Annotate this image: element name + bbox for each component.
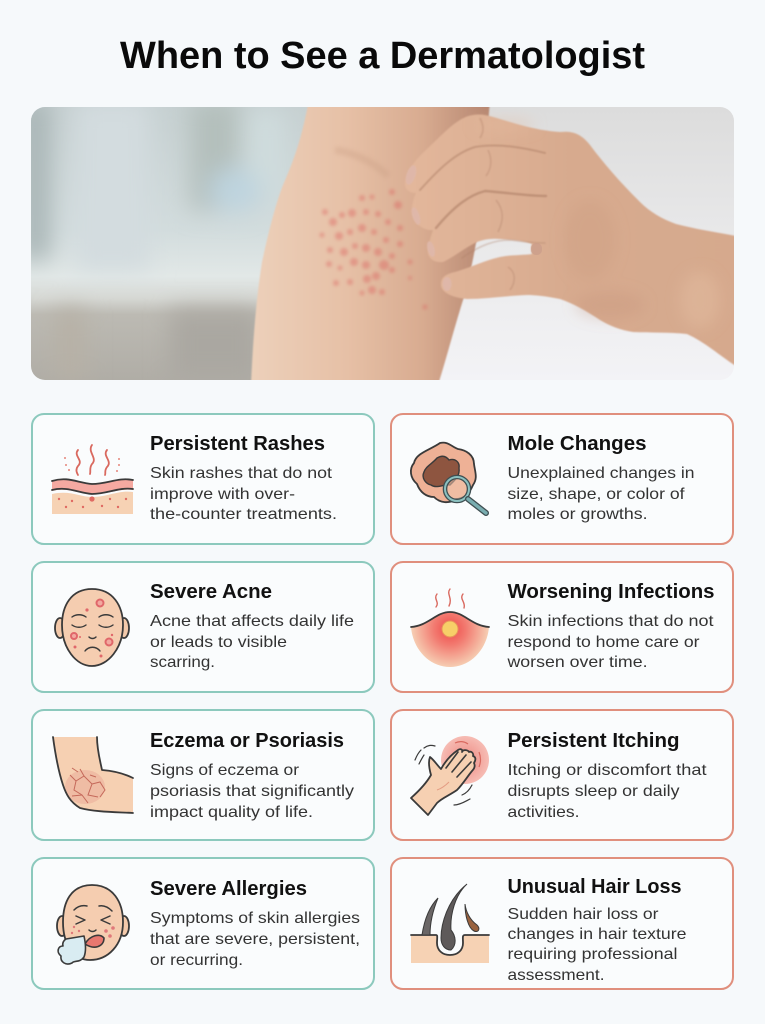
description: activities. — [508, 804, 580, 821]
description: Skin rashes that do not — [150, 465, 333, 482]
description — [506, 613, 714, 671]
description: impact quality of life. — [150, 804, 313, 821]
description: scarring. — [150, 654, 215, 671]
card: severe acne — [32, 562, 374, 692]
hand — [405, 115, 736, 366]
photo: hand scratching a rash on the forearm — [20, 100, 736, 385]
heading: Severe Acne — [150, 581, 272, 603]
description — [150, 762, 354, 821]
knuckle marks — [480, 118, 514, 290]
heading: Eczema or Psoriasis — [150, 730, 344, 752]
card: unusual hair loss — [391, 858, 733, 989]
rash — [320, 189, 428, 310]
description: moles or growths. — [508, 506, 648, 523]
card: eczema or psoriasis — [32, 710, 374, 840]
icon: cracked skin on elbow — [53, 737, 133, 813]
description — [150, 465, 337, 523]
description — [150, 613, 354, 671]
icon: mole under magnifying glass — [411, 443, 486, 513]
description: psoriasis that significantly — [150, 783, 354, 800]
description — [150, 910, 360, 969]
description: that are severe, persistent, — [150, 931, 360, 948]
icon: face with acne — [55, 589, 129, 666]
description: Sudden hair loss or — [508, 906, 659, 923]
description: changes in hair texture — [508, 926, 687, 943]
card: persistent itching — [391, 710, 733, 840]
card: mole changes — [391, 414, 733, 544]
description — [508, 762, 707, 821]
description: or recurring. — [150, 952, 243, 969]
icon: sneezing face — [57, 885, 129, 964]
description: disrupts sleep or daily — [508, 783, 680, 800]
card: severe allergies — [32, 858, 374, 989]
description: size, shape, or color of — [508, 486, 685, 503]
heading: Persistent Itching — [508, 730, 680, 752]
description — [508, 465, 694, 523]
description: Signs of eczema or — [150, 762, 300, 779]
heading: Unusual Hair Loss — [508, 876, 682, 898]
heading: Mole Changes — [508, 433, 646, 455]
card: worsening infections — [391, 562, 733, 692]
description: Itching or discomfort that — [508, 762, 707, 779]
icon: hair follicle — [411, 884, 489, 963]
fingernails — [404, 164, 452, 291]
description — [508, 906, 687, 984]
hand shading — [420, 146, 546, 258]
icon: scratching hand — [411, 736, 489, 815]
description: Skin infections that do not — [508, 613, 714, 630]
description: or leads to visible — [150, 634, 287, 651]
description: improve with over- — [150, 486, 295, 503]
description: assessment. — [508, 967, 604, 984]
heading: Worsening Infections — [508, 581, 714, 603]
description: Acne that affects daily life — [150, 613, 354, 630]
card: persistent rashes — [32, 414, 374, 544]
description: Unexplained changes in — [508, 465, 694, 482]
description: worsen over time. — [506, 654, 648, 671]
heading: Severe Allergies — [150, 878, 307, 900]
heading: Persistent Rashes — [150, 433, 325, 455]
title: When to See a Dermatologist — [120, 35, 645, 77]
description: the-counter treatments. — [150, 506, 337, 523]
forearm — [251, 100, 490, 385]
description: Symptoms of skin allergies — [150, 910, 360, 927]
icon: infected skin bump — [411, 589, 489, 667]
description: respond to home care or — [508, 634, 700, 651]
icon: skin layers with heat waves — [52, 445, 133, 514]
description: requiring professional — [508, 946, 678, 963]
